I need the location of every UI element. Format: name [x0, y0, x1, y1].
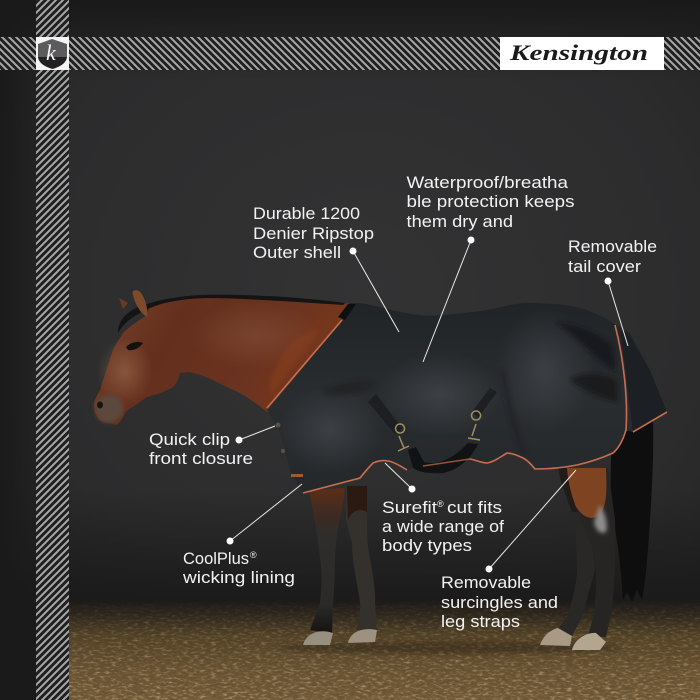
neck highlight [190, 301, 320, 369]
callout: surefit cut [382, 463, 504, 555]
callout: surefit cut: body types [382, 536, 472, 555]
nostril [97, 402, 103, 408]
tail [611, 420, 653, 602]
neck base colour [270, 330, 320, 395]
ear [133, 290, 147, 317]
rear clip [468, 411, 481, 440]
far ear [119, 298, 128, 309]
callout: waterproof [406, 173, 574, 362]
blanket piping [267, 320, 667, 493]
shield logo [36, 37, 69, 70]
callout: waterproof: ble protection keeps [406, 192, 574, 211]
callout: surcingles [441, 470, 576, 631]
blanket [267, 303, 667, 493]
belly strap [408, 443, 478, 473]
eye [126, 342, 143, 350]
front strap [368, 394, 402, 434]
front clip [396, 424, 409, 451]
neck and head [94, 290, 352, 425]
callout: waterproof: them dry and [406, 212, 513, 231]
callout: surefit cut: ® [437, 499, 444, 509]
near hind leg [558, 468, 615, 650]
callout: quick clip [149, 426, 275, 468]
far hind leg [540, 515, 595, 646]
callout: coolplus lining: ® [250, 550, 257, 560]
Kensington wordmark [500, 37, 664, 70]
callout: quick clip: Quick clip [149, 430, 230, 449]
callout: surefit cut: cut fits [447, 498, 502, 517]
callout: coolplus lining [182, 484, 302, 587]
callout: coolplus lining: CoolPlus [183, 549, 249, 568]
blanket neck strap [338, 304, 356, 320]
muzzle shading [95, 395, 123, 423]
far foreleg [345, 486, 377, 643]
near foreleg [303, 488, 344, 645]
front closure clips [276, 422, 303, 477]
callout: surcingles: Removable [441, 573, 531, 592]
rear strap [472, 388, 497, 418]
hoof shadows [280, 642, 620, 654]
callout: tail cover: tail cover [568, 257, 641, 276]
callout: durable shell: Denier Ripstop [253, 224, 374, 243]
shield logo: k [46, 40, 57, 65]
callout: surefit cut: a wide range of [382, 517, 504, 536]
ground [69, 600, 700, 700]
callout: durable shell: Outer shell [253, 243, 341, 262]
callout: surcingles: surcingles and [441, 593, 558, 612]
callout: surefit cut: Surefit [382, 498, 437, 517]
horse [94, 290, 667, 654]
callout: surcingles: leg straps [441, 612, 520, 631]
callout: waterproof: Waterproof/breatha [406, 173, 569, 192]
callout: durable shell [253, 204, 399, 332]
callout: quick clip: front closure [149, 449, 253, 468]
callout: durable shell: Durable 1200 [253, 204, 360, 223]
mane [118, 295, 345, 333]
blanket highlights and folds [404, 369, 476, 420]
callout: tail cover [568, 237, 657, 346]
vertical striped band [36, 0, 69, 700]
callout: tail cover: Removable [568, 237, 657, 256]
cheek highlight [97, 338, 153, 406]
Kensington wordmark: Kensington [509, 40, 648, 65]
callout: coolplus lining: wicking lining [182, 568, 295, 587]
horizontal striped band [0, 37, 700, 70]
